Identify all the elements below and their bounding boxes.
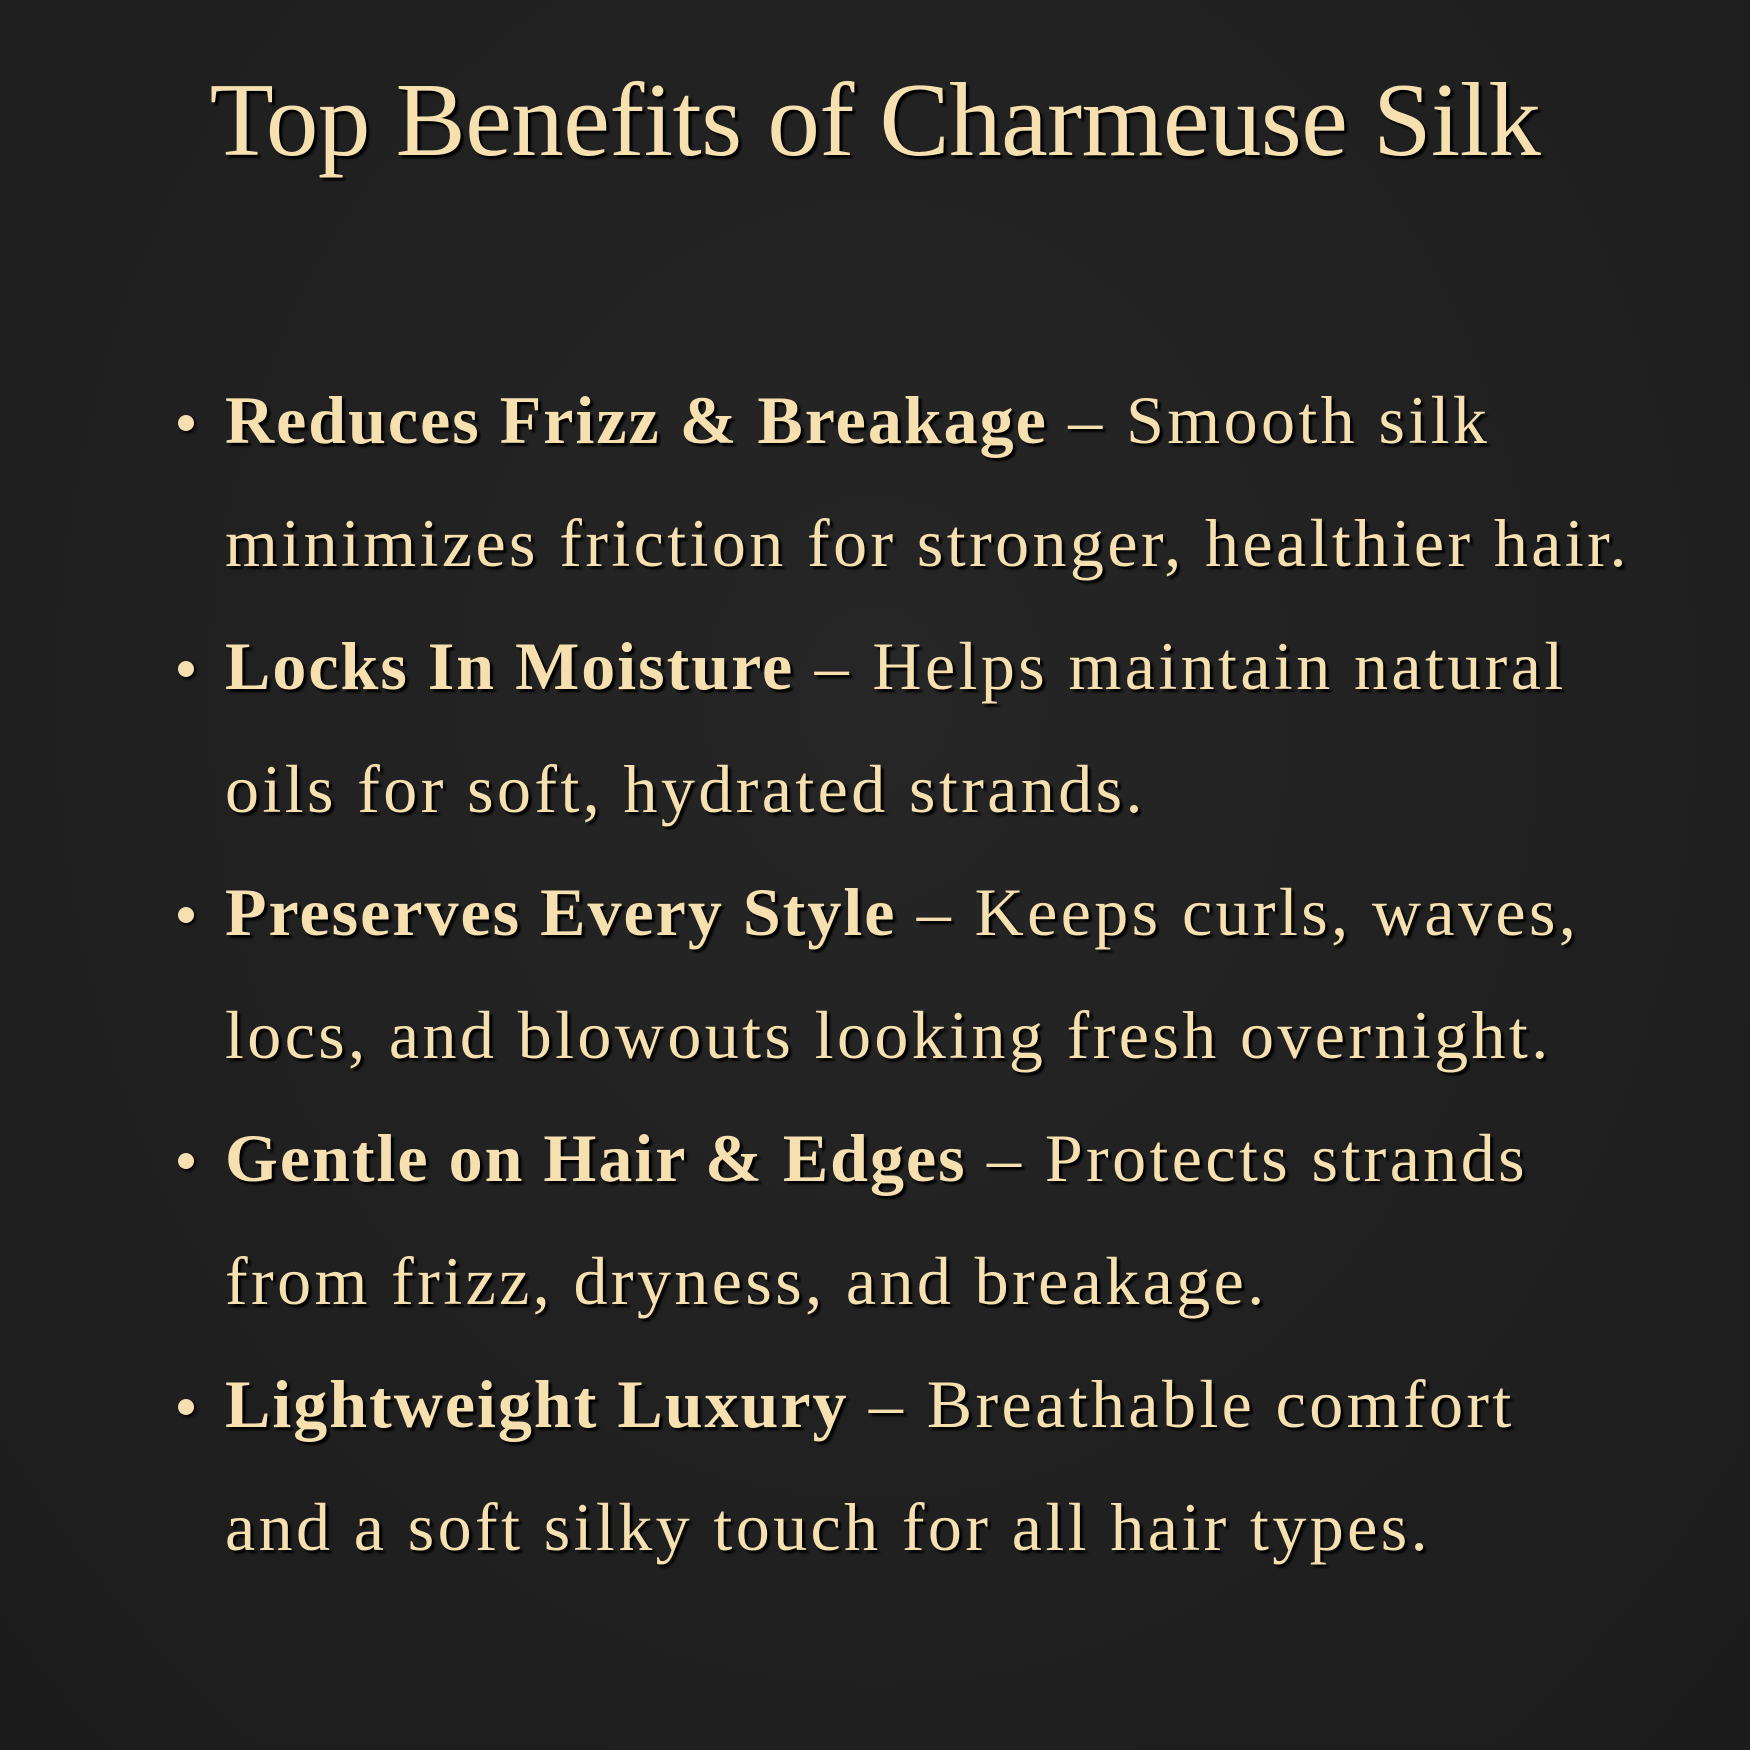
benefit: gentle on hair: from frizz, dryness, and breakage.	[225, 1243, 1268, 1319]
benefit: lightweight luxury	[178, 1366, 1515, 1568]
benefit: gentle on hair	[178, 1120, 1528, 1322]
benefit: preserves style: locs, and blowouts looking fresh overnight.	[225, 997, 1552, 1073]
benefit: reduces frizz: minimizes friction for stronger, healthier hair.	[225, 505, 1630, 581]
benefit: preserves style	[178, 874, 1579, 1076]
benefits list	[178, 382, 1630, 1568]
benefit: preserves style: Preserves Every Style – Keeps curls, waves,	[225, 874, 1579, 950]
benefit: reduces frizz: Reduces Frizz & Breakage – Smooth silk	[225, 382, 1490, 458]
benefit: reduces frizz	[178, 382, 1630, 584]
benefit: lightweight luxury: and a soft silky touch for all hair types.	[225, 1489, 1431, 1565]
benefit: locks in moisture: oils for soft, hydrated strands.	[225, 751, 1146, 827]
title: Top Benefits of Charmeuse Silk	[210, 61, 1540, 178]
benefit: gentle on hair: Gentle on Hair & Edges – Protects strands	[225, 1120, 1528, 1196]
benefit: lightweight luxury: Lightweight Luxury – Breathable comfort	[225, 1366, 1515, 1442]
benefit: locks in moisture	[178, 628, 1567, 830]
benefit: locks in moisture: Locks In Moisture – Helps maintain natural	[225, 628, 1567, 704]
